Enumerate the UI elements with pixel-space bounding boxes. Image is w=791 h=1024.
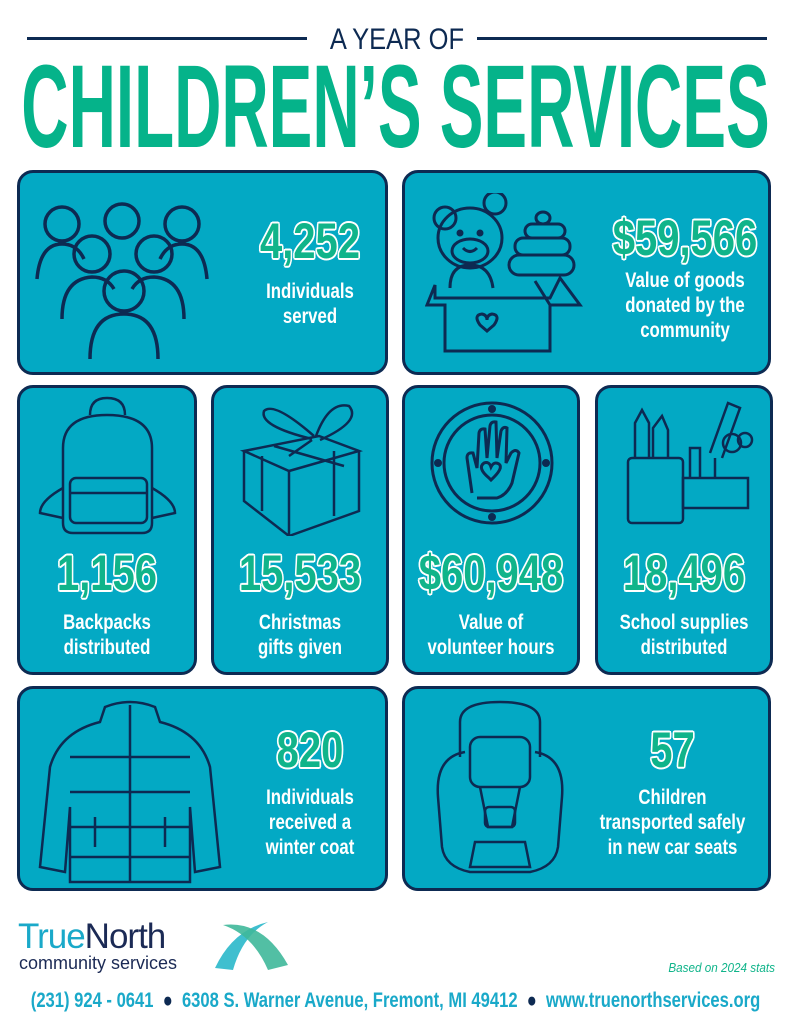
icon: supplies — [626, 401, 754, 524]
stat: 1,156: 1,156 — [57, 545, 157, 601]
stat: 57 — [600, 722, 746, 859]
stat: 15,533: 15,533 — [239, 545, 361, 601]
stat: 15,533 — [239, 545, 362, 659]
stat: 15,533: Christmas — [259, 611, 341, 634]
stat: 57: 57 — [650, 722, 695, 778]
panel: individuals served: served — [283, 305, 337, 328]
note: based on 2024 stats: Based on 2024 stats — [668, 960, 775, 975]
panel: backpacks — [17, 385, 197, 675]
stat: 57: transported safely — [600, 811, 745, 834]
stat: 18,496: School supplies — [620, 611, 748, 634]
icon: logo mark — [215, 922, 288, 970]
stat: 4,252: 4,252 — [260, 213, 360, 269]
icon: hand with heart — [430, 402, 554, 524]
panel: car seats — [402, 686, 771, 891]
icon: gift — [240, 404, 363, 536]
icon: coat — [38, 700, 222, 884]
stat: 1,156: Backpacks — [63, 611, 151, 634]
panel: christmas gifts — [211, 385, 389, 675]
stat: 15,533: gifts given — [258, 636, 342, 659]
header: a year of — [27, 23, 767, 56]
header: a year of: A YEAR OF — [330, 23, 464, 56]
stat: $60,948: Value of — [459, 611, 523, 634]
logo: TrueNorth: community services — [19, 953, 177, 973]
stat: $59,566: $59,566 — [613, 210, 757, 266]
panel: goods donated — [402, 170, 771, 375]
icon: backpack — [38, 396, 176, 534]
stat: 1,156: distributed — [64, 636, 150, 659]
icon: teddy in box — [425, 193, 583, 352]
icon: people — [35, 202, 209, 359]
stat: 57: in new car seats — [608, 836, 737, 859]
stat: 820: Individuals — [266, 786, 354, 809]
stat: $59,566 — [612, 210, 758, 342]
contact line: ● — [163, 989, 173, 1012]
panel: school supplies — [595, 385, 773, 675]
panel: individuals served — [17, 170, 388, 375]
contact line: ● — [527, 989, 537, 1012]
panel: volunteer hours — [402, 385, 580, 675]
contact line: (231) 924 - 0641 6308 S. Warner Avenue, Fremont, MI 49412 www.truenorthservices.org — [31, 989, 760, 1012]
stat: 57: Children — [638, 786, 707, 809]
stat: 820 — [266, 722, 354, 859]
stat: $59,566: donated by the — [625, 294, 745, 317]
stat: $60,948 — [418, 545, 564, 659]
stat: 820: winter coat — [266, 836, 354, 859]
title: CHILDREN’S SERVICES — [21, 41, 770, 173]
stat: 18,496: 18,496 — [623, 545, 745, 601]
stat: $60,948: $60,948 — [419, 545, 563, 601]
stat: 18,496 — [620, 545, 748, 659]
stat: 1,156 — [57, 545, 158, 659]
stat: $59,566: community — [640, 319, 730, 342]
icon: car seat — [436, 700, 564, 874]
stat: $59,566: Value of goods — [625, 269, 745, 292]
stat: 820: 820 — [277, 722, 343, 778]
logo: TrueNorth — [18, 917, 288, 973]
stat: 4,252 — [258, 213, 360, 328]
stat: 18,496: distributed — [641, 636, 727, 659]
panel: winter coats — [17, 686, 388, 891]
stat: $60,948: volunteer hours — [428, 636, 554, 659]
stat: 820: received a — [269, 811, 351, 834]
logo: TrueNorth: TrueNorth — [18, 917, 165, 956]
stat: 4,252: Individuals — [266, 280, 354, 303]
